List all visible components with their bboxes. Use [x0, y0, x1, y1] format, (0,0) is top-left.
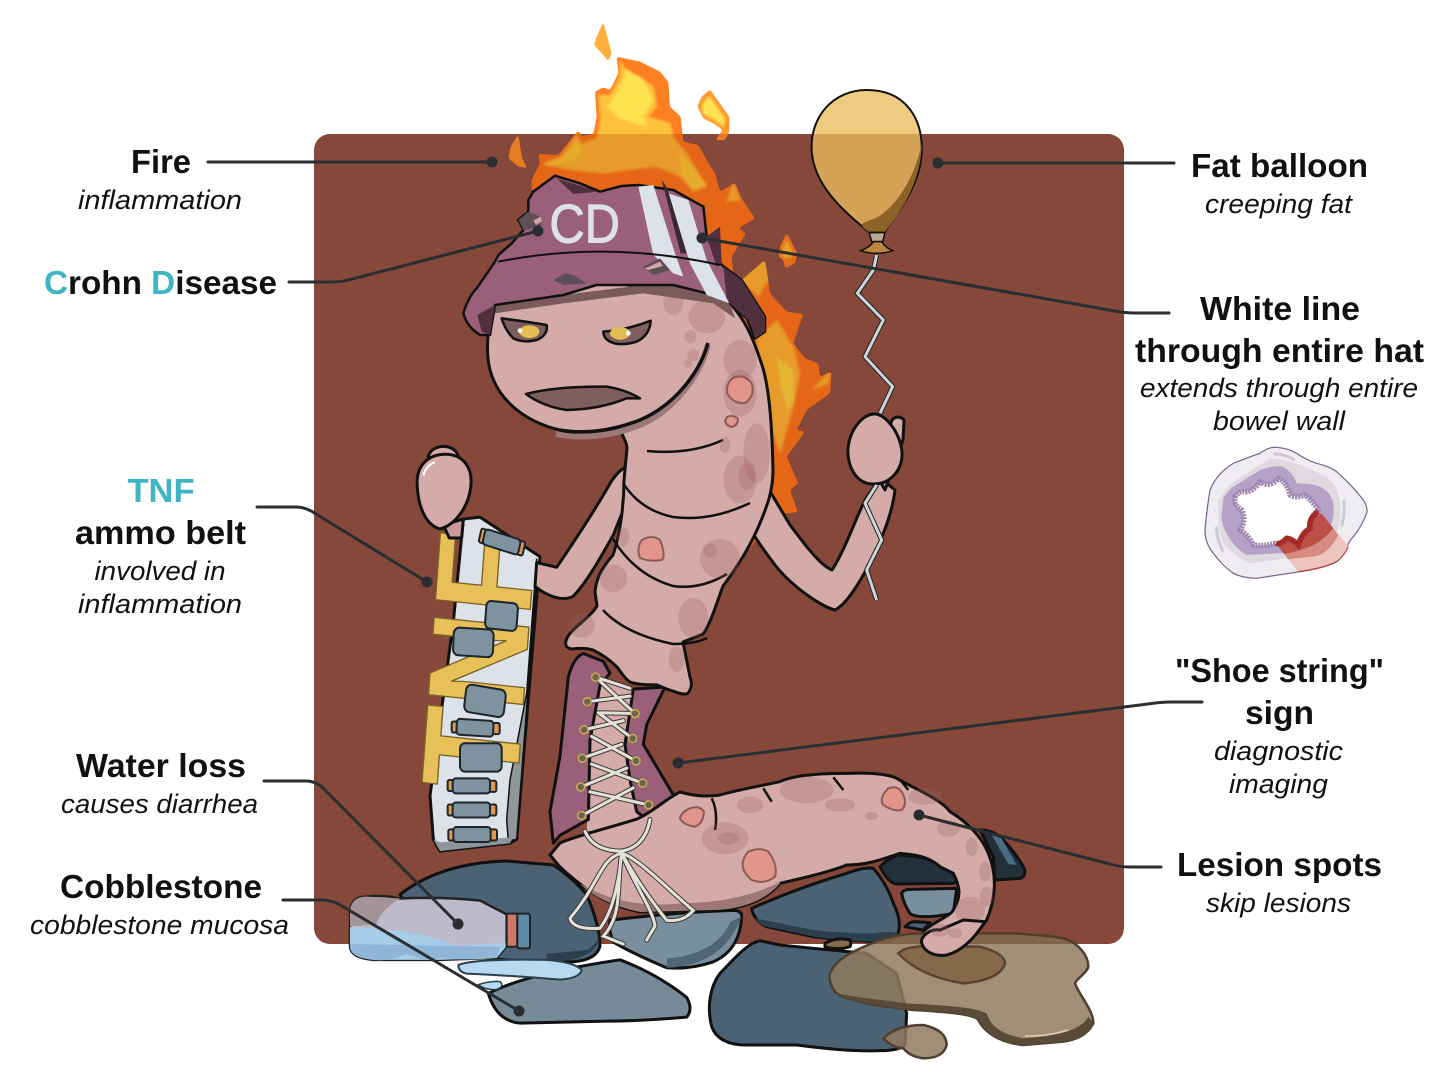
- label: Shoe string sign: "Shoe string": [1175, 652, 1384, 689]
- label: Lesion spots: Lesion spots: [1177, 846, 1382, 883]
- callout: cobblestone line: [283, 900, 524, 1016]
- label: Water loss: [61, 747, 258, 819]
- label: Cobblestone: cobblestone mucosa: [30, 910, 289, 940]
- icon: water bottle: [350, 896, 582, 990]
- callout: lesion spots line: [914, 810, 1161, 867]
- label: White line through entire hat: bowel wall: [1213, 406, 1346, 436]
- icon: balloon string: [857, 255, 893, 600]
- label: Lesion spots: [1177, 846, 1382, 918]
- label: White line through entire hat: [1135, 290, 1424, 436]
- callout: fat balloon line: [932, 158, 1174, 168]
- lesion bumps upper body: [638, 376, 753, 561]
- label: Fat balloon: [1191, 147, 1368, 219]
- label: White line through entire hat: extends through entire: [1140, 373, 1418, 403]
- icon: face eyes and mouth: [502, 318, 651, 410]
- label: Shoe string sign: diagnostic: [1214, 736, 1344, 766]
- callout: shoe string line: [672, 702, 1202, 768]
- label: TNF ammo belt: ammo belt: [75, 514, 246, 551]
- label: Water loss: Water loss: [76, 747, 246, 784]
- blend overlay darkens art inside panel: [314, 134, 1124, 944]
- tail tip resting above puddle: [921, 920, 985, 955]
- icon: brown puddle: [830, 933, 1093, 1058]
- label: Water loss: causes diarrhea: [61, 789, 258, 819]
- icon: small flame right: [697, 89, 729, 141]
- mottled patches: [663, 288, 770, 490]
- callout: white line: [696, 232, 1169, 313]
- label: TNF ammo belt: [75, 472, 246, 619]
- label: Fat balloon: Fat balloon: [1191, 147, 1368, 184]
- puddle strip darkened inside panel: [874, 934, 1072, 944]
- icon: hat with CD: [463, 176, 765, 338]
- callout: crohn hat line: [289, 226, 544, 282]
- icon: small flame top: [594, 22, 612, 62]
- icon: head and upper body: [488, 280, 773, 694]
- label: Lesion spots: skip lesions: [1206, 888, 1351, 918]
- label: TNF ammo belt: inflammation: [78, 589, 242, 619]
- icon: right arm and hand: [745, 414, 904, 610]
- label: Fire: Fire: [131, 143, 191, 180]
- callout: fire line: [208, 156, 498, 168]
- icon: TNF ammo belt: [393, 517, 566, 851]
- label: White line through entire hat: through entire hat: [1135, 332, 1424, 369]
- icon: lower bowel body: [550, 773, 994, 956]
- callout: water loss line: [264, 781, 464, 930]
- label: Fire: inflammation: [78, 185, 242, 215]
- label: Fire: [78, 143, 242, 215]
- icon: laces and bow: [570, 673, 693, 944]
- label: Shoe string sign: sign: [1245, 694, 1314, 731]
- label: Crohn Disease: Crohn Disease: [44, 264, 277, 301]
- label: White line through entire hat: White line: [1200, 290, 1360, 327]
- text: CD on hat: CD: [549, 193, 620, 255]
- label: Fat balloon: creeping fat: [1205, 189, 1354, 219]
- panel: background square: [314, 134, 1124, 944]
- icon: left arm and hand: [417, 446, 626, 599]
- label: Cobblestone: Cobblestone: [60, 868, 262, 905]
- callout: ammo belt line: [257, 507, 432, 588]
- label: TNF ammo belt: TNF: [128, 472, 194, 509]
- icon: fat balloon: [812, 90, 922, 253]
- icon: ammo cartridges: [448, 527, 526, 842]
- lesion bumps: [680, 787, 905, 882]
- icon: bowel wall cross-section: [1205, 447, 1367, 578]
- label: Shoe string sign: [1175, 652, 1384, 799]
- icon: small flame near balloon: [778, 233, 797, 268]
- label: TNF ammo belt: involved in: [94, 556, 226, 586]
- icon: fire flames: [508, 22, 832, 555]
- icon: cobblestones: [400, 830, 1025, 1051]
- label: Cobblestone: [30, 868, 289, 940]
- label: Shoe string sign: imaging: [1229, 769, 1328, 799]
- icon: corset lacing (shoe string sign): [550, 653, 675, 843]
- lesion patches on bowel: [702, 777, 993, 923]
- icon: small flame left: [508, 134, 527, 168]
- text: TNF letters on belt: TNF: [393, 525, 566, 797]
